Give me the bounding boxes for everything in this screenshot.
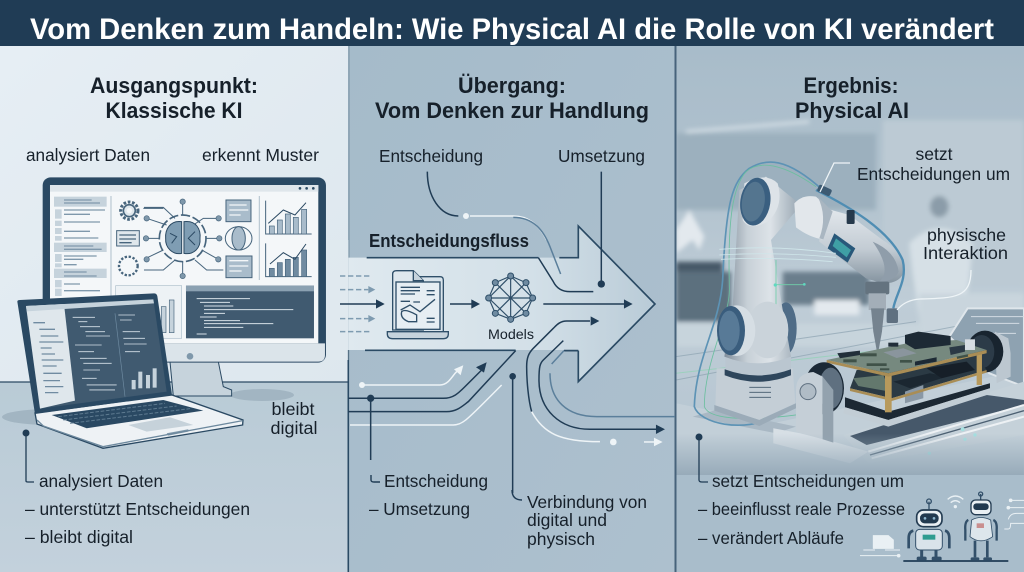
robot two xyxy=(965,492,997,561)
brain xyxy=(166,221,182,254)
label: Entscheidung: Entscheidung xyxy=(379,146,483,166)
callout: physische Interaktion: physische xyxy=(927,225,1006,245)
callout: setzt Entscheidungen um xyxy=(820,144,1010,192)
text: Verbindung von digital und physisch: physisch xyxy=(527,529,595,549)
arrow: large flow arrow xyxy=(330,226,655,382)
list: Entscheidung, Umsetzung: Entscheidung xyxy=(384,471,488,491)
panel dividers xyxy=(348,46,676,572)
label: bleibt digital: bleibt xyxy=(272,399,315,419)
title bar xyxy=(0,0,1024,46)
list: Physical AI outcomes: – beeinflusst reale Prozesse xyxy=(698,499,905,519)
list: Physical AI outcomes xyxy=(696,434,905,548)
side monitor xyxy=(949,308,1024,387)
heading: Ausgangspunkt: Klassische KI xyxy=(106,98,242,123)
label: erkennt Muster: erkennt Muster xyxy=(202,145,319,165)
list: Entscheidung, Umsetzung: – Umsetzung xyxy=(369,499,470,519)
lower chart and code xyxy=(116,286,182,338)
callout: setzt Entscheidungen um: setzt xyxy=(916,144,953,164)
robot one xyxy=(909,499,949,561)
heading: Ausgangspunkt xyxy=(90,73,258,123)
callout: setzt Entscheidungen um: Entscheidungen um xyxy=(857,164,1010,184)
base xyxy=(715,368,795,420)
lower arm xyxy=(724,177,801,363)
wifi xyxy=(948,496,963,508)
panel: Uebergang xyxy=(349,45,676,572)
label: Umsetzung: Umsetzung xyxy=(558,146,645,166)
top board xyxy=(827,340,987,373)
label: bleibt digital xyxy=(270,399,318,438)
list: classic AI features: – bleibt digital xyxy=(25,527,133,547)
callout: physische Interaktion: Interaktion xyxy=(923,243,1008,263)
list: Physical AI outcomes: setzt Entscheidungen um xyxy=(712,471,904,491)
text: Verbindung von digital und physisch xyxy=(512,490,647,549)
left mount xyxy=(804,362,844,414)
sidebar xyxy=(54,197,107,296)
panel: Ergebnis Physical AI photo xyxy=(676,118,1024,475)
gear xyxy=(121,202,138,219)
label: Models: Models xyxy=(488,326,534,342)
label: analysiert Daten: analysiert Daten xyxy=(26,145,150,165)
list: classic AI features xyxy=(22,430,250,547)
cables back xyxy=(694,162,823,425)
list: classic AI features: analysiert Daten xyxy=(39,471,163,491)
heading: Ergebnis: Physical AI xyxy=(795,98,909,123)
heading: Uebergang xyxy=(375,73,649,123)
screen on arm xyxy=(828,233,855,263)
icon: two robots xyxy=(860,492,1024,561)
network xyxy=(143,202,223,276)
cable front xyxy=(816,190,904,308)
text: Verbindung von digital und physisch: digital und xyxy=(527,510,607,530)
icon: laptop document xyxy=(387,271,448,339)
panel: Ausgangspunkt Klassische KI xyxy=(0,45,349,572)
heading: Uebergang: Übergang: xyxy=(458,73,566,98)
icon: laptop with code xyxy=(17,293,243,448)
table xyxy=(676,383,1024,448)
flow lines xyxy=(340,172,675,493)
right mount xyxy=(995,332,1011,383)
tool xyxy=(865,282,889,294)
heading: Uebergang: Vom Denken zur Handlung xyxy=(375,98,649,123)
list: Physical AI outcomes: – verändert Abläufe xyxy=(698,528,844,548)
bottom fade xyxy=(676,438,1024,475)
rings xyxy=(719,248,836,262)
shoulder xyxy=(743,177,780,226)
label: bleibt digital: digital xyxy=(270,418,318,438)
lower arm joint rear xyxy=(782,302,797,352)
glows xyxy=(961,427,965,431)
list: classic AI features: – unterstützt Entscheidungen xyxy=(25,499,250,519)
text: Verbindung von digital und physisch: Verbindung von xyxy=(527,492,647,512)
callout: physische Interaktion xyxy=(897,225,1008,310)
icon: Models network xyxy=(486,273,536,322)
rails xyxy=(1016,382,1024,388)
background factory xyxy=(676,120,1024,347)
heading: Ergebnis: Ergebnis: xyxy=(804,73,898,98)
base plate xyxy=(845,383,990,420)
data lines and folder xyxy=(860,499,1024,557)
joint lower xyxy=(732,305,755,356)
label: Entscheidungsfluss: Entscheidungsfluss xyxy=(369,231,529,251)
list: Entscheidung, Umsetzung xyxy=(369,471,488,519)
icon: desktop monitor with AI dashboard xyxy=(43,177,326,396)
forearm xyxy=(819,207,904,283)
floor lines xyxy=(676,321,955,380)
heading: Ergebnis xyxy=(795,73,909,123)
lower deck xyxy=(850,357,987,398)
test bench in zoom coordinates xyxy=(773,331,1024,463)
heading: Ausgangspunkt: Ausgangspunkt: xyxy=(90,73,258,98)
boxes xyxy=(226,200,251,222)
title bar: Vom Denken zum Handeln: Wie Physical AI die Rolle von KI verändert xyxy=(30,13,994,46)
charts xyxy=(266,201,312,277)
